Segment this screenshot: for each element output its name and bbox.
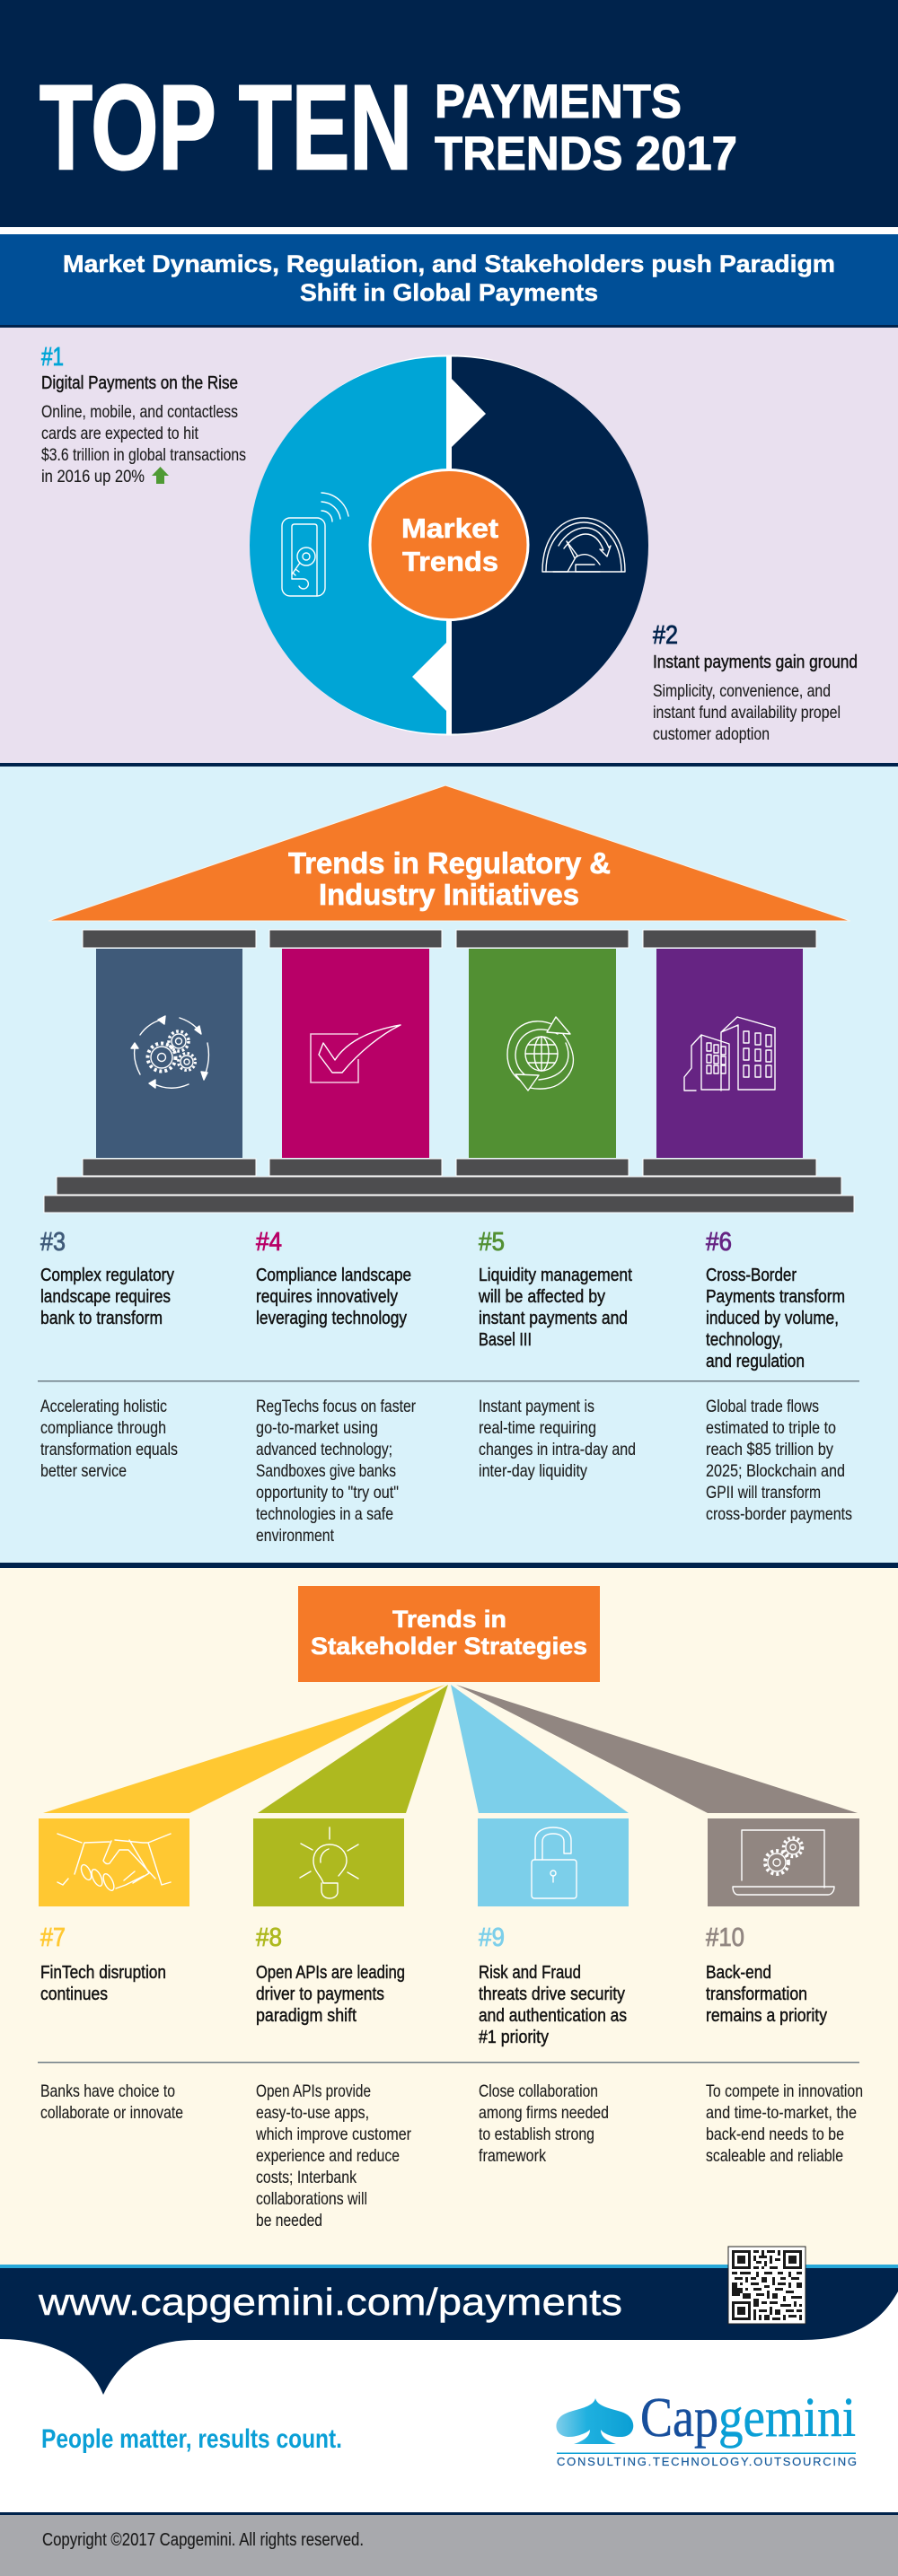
column 5: green (469, 949, 616, 1158)
center circle: market trends (370, 470, 528, 619)
trend 2 text: Instant payments gain ground (653, 653, 858, 672)
trend 10 text: Back-end (706, 1963, 771, 1983)
trend 5 text: Instant payment is (479, 1397, 594, 1416)
header banner (0, 0, 898, 227)
center circle: market trends: Trends (402, 546, 498, 577)
trend 5 text: #5 (479, 1228, 505, 1257)
trend 3 text: #3 (40, 1228, 66, 1257)
title: top ten: TOP TEN (40, 61, 412, 195)
icon: light bulb (300, 1827, 358, 1898)
trend 10 text (706, 1923, 863, 2166)
trend 6 text: Global trade flows (706, 1397, 819, 1416)
trend 7 text: #7 (40, 1923, 66, 1952)
icon: speedometer (542, 518, 625, 572)
icon: gears with arrows (131, 1016, 208, 1088)
panel: regulatory and industry initiatives (0, 767, 898, 1563)
trend 5 text: instant payments and (479, 1309, 628, 1328)
ray: olive (258, 1685, 448, 1813)
trend 6 text: #6 (706, 1228, 732, 1257)
column 6: purple (656, 949, 803, 1158)
box 7: yellow (39, 1818, 189, 1906)
trend 4 text: advanced technology; (256, 1440, 392, 1459)
trend 1 text: Digital Payments on the Rise (41, 373, 238, 393)
icon: open padlock (532, 1827, 577, 1898)
panel: market trends (0, 328, 898, 767)
trend 4 text: go-to-market using (256, 1418, 378, 1438)
heading box: Trends in (392, 1606, 506, 1633)
trend 3 text: landscape requires (40, 1287, 171, 1307)
trend 3 text: bank to transform (40, 1309, 163, 1328)
trend 9 text (479, 1923, 627, 2166)
trend 6 text: Cross-Border (706, 1266, 797, 1285)
ray: blue (451, 1685, 629, 1813)
trend 6 text: technology, (706, 1330, 783, 1350)
icon: green up arrow (152, 467, 169, 484)
copyright footer: Copyright ©2017 Capgemini. All rights reserved. (42, 2530, 364, 2550)
trend 5 text: Basel III (479, 1330, 532, 1350)
trend 6 text: induced by volume, (706, 1309, 839, 1328)
trend 1 text: Online, mobile, and contactless (41, 402, 238, 422)
trend 9 text: to establish strong (479, 2125, 594, 2144)
subtitle: TRENDS 2017 (435, 127, 737, 180)
trend 7 text: collaborate or innovate (40, 2103, 183, 2123)
trend 5 text: changes in intra-day and (479, 1440, 636, 1459)
trend 5 text (478, 1228, 636, 1481)
trend 6 text: estimated to triple to (706, 1418, 836, 1438)
trend 8 text: Open APIs provide (256, 2081, 371, 2101)
trend 9 text: Risk and Fraud (479, 1963, 581, 1983)
trend 2 text: instant fund availability propel (653, 703, 841, 723)
trend 7 text: Banks have choice to (40, 2081, 175, 2101)
sub-heading band: Shift in Global Payments (300, 279, 598, 306)
trend 8 text: collaborations will (256, 2189, 367, 2209)
trend 5 text: real-time requiring (479, 1418, 596, 1438)
trend 4 text: technologies in a safe (256, 1504, 393, 1524)
trend 10 text: #10 (706, 1923, 744, 1952)
trend 8 text: easy-to-use apps, (256, 2103, 369, 2123)
qr code (728, 2247, 806, 2324)
trend 8 text: be needed (256, 2211, 322, 2230)
trend 3 text (40, 1228, 178, 1481)
center circle: market trends: Market (401, 513, 498, 544)
trend 1 text: cards are expected to hit (41, 424, 198, 443)
subtitle: PAYMENTS (435, 75, 682, 128)
capgemini logo: gemini (718, 2388, 856, 2449)
trend 10 text: and time-to-market, the (706, 2103, 857, 2123)
footer band with url: www.capgemini.com/payments (38, 2281, 622, 2323)
trend 6 text: and regulation (706, 1352, 805, 1371)
trend 8 text: driver to payments (256, 1985, 384, 2004)
trend 1 text (41, 343, 246, 486)
icon: office buildings (684, 1017, 775, 1091)
trend 9 text: threats drive security (479, 1985, 625, 2004)
trend 8 text: #8 (256, 1923, 282, 1952)
trend 2 text: customer adoption (653, 724, 770, 744)
trend 4 text: RegTechs focus on faster (256, 1397, 416, 1416)
trend 5 text: inter-day liquidity (479, 1461, 587, 1481)
trend 3 text: Complex regulatory (40, 1266, 174, 1285)
panel: stakeholder strategies (0, 1563, 898, 2265)
trend 6 text (706, 1228, 852, 1524)
trend 8 text: Open APIs are leading (256, 1963, 405, 1983)
footer band with url (0, 2265, 898, 2395)
tagline: People matter, results count. (41, 2424, 342, 2454)
trend 3 text: better service (40, 1461, 127, 1481)
trend 10 text: remains a priority (706, 2006, 827, 2026)
trend 9 text: and authentication as (479, 2006, 627, 2026)
trend 10 text: scaleable and reliable (706, 2146, 843, 2166)
trend 1 text: $3.6 trillion in global transactions (41, 445, 246, 465)
column 3: navy (96, 949, 242, 1158)
circle chart: right half (452, 357, 648, 734)
trend 1 text: #1 (41, 343, 64, 372)
trend 3 text: transformation equals (40, 1440, 178, 1459)
trend 4 text: opportunity to "try out" (256, 1483, 399, 1503)
trend 3 text: Accelerating holistic (40, 1397, 167, 1416)
trend 8 text: costs; Interbank (256, 2168, 357, 2187)
trend 9 text: framework (479, 2146, 546, 2166)
icon: handshake (57, 1834, 171, 1892)
box 9: blue (478, 1818, 629, 1906)
trend 10 text: transformation (706, 1985, 807, 2004)
trend 4 text: environment (256, 1526, 334, 1546)
trend 6 text: 2025; Blockchain and (706, 1461, 845, 1481)
trend 2 text: #2 (653, 621, 678, 650)
sub-heading band (0, 234, 898, 328)
trend 4 text (256, 1228, 416, 1546)
trend 4 text: #4 (256, 1228, 282, 1257)
trend 2 text (653, 621, 858, 744)
heading box (298, 1586, 600, 1682)
trend 7 text (40, 1923, 183, 2123)
trend 2 text: Simplicity, convenience, and (653, 681, 831, 701)
trend 5 text: will be affected by (478, 1287, 605, 1307)
trend 6 text: Payments transform (706, 1287, 845, 1307)
trend 4 text: Sandboxes give banks (256, 1461, 396, 1481)
trend 8 text: which improve customer (255, 2125, 411, 2144)
trend 9 text: among firms needed (479, 2103, 609, 2123)
ray: gray (456, 1685, 858, 1813)
trend 6 text: reach $85 trillion by (706, 1440, 833, 1459)
trend 5 text: Liquidity management (479, 1266, 632, 1285)
copyright footer (0, 2512, 898, 2576)
trend 4 text: requires innovatively (256, 1287, 398, 1307)
trend 8 text: experience and reduce (256, 2146, 400, 2166)
trend 7 text: continues (40, 1985, 108, 2004)
capgemini logo: Cap (640, 2388, 718, 2449)
trend 10 text: To compete in innovation (706, 2081, 863, 2101)
trend 9 text: #1 priority (479, 2028, 549, 2047)
roof with heading: Industry Initiatives (319, 878, 579, 911)
sub-heading band: Market Dynamics, Regulation, and Stakeholders push Paradigm (63, 250, 835, 277)
trend 7 text: FinTech disruption (40, 1963, 166, 1983)
trend 4 text: Compliance landscape (256, 1266, 411, 1285)
trend 9 text: #9 (479, 1923, 505, 1952)
trend 6 text: cross-border payments (706, 1504, 852, 1524)
trend 4 text: leveraging technology (256, 1309, 407, 1328)
icon: laptop with gears (733, 1830, 834, 1895)
box 8: olive (253, 1818, 404, 1906)
trend 8 text: paradigm shift (256, 2006, 357, 2026)
circle chart: left half (250, 357, 446, 734)
column caps and bases (44, 930, 854, 1213)
box 10: gray (708, 1818, 859, 1906)
column 4: magenta (282, 949, 429, 1158)
trend 10 text: back-end needs to be (706, 2125, 844, 2144)
trend 6 text: GPII will transform (706, 1483, 821, 1503)
trend 3 text: compliance through (40, 1418, 166, 1438)
roof with heading: Trends in Regulatory & (288, 846, 611, 880)
subtitle (435, 75, 737, 180)
icon: globe with arrows (507, 1017, 573, 1091)
roof with heading (48, 785, 850, 921)
capgemini logo (556, 2388, 857, 2468)
trend 9 text: Close collaboration (479, 2081, 598, 2101)
trend 8 text (255, 1923, 411, 2230)
white disc behind circle chart (251, 355, 647, 736)
icon: checkmark box (311, 1025, 401, 1082)
heading box: Stakeholder Strategies (311, 1633, 587, 1660)
icon: spade (556, 2398, 633, 2444)
icon: phone with key (282, 493, 348, 596)
ray: yellow (43, 1685, 445, 1813)
trend 1 text: in 2016 up 20% (41, 467, 145, 486)
capgemini logo: CONSULTING.TECHNOLOGY.OUTSOURCING (557, 2455, 857, 2468)
